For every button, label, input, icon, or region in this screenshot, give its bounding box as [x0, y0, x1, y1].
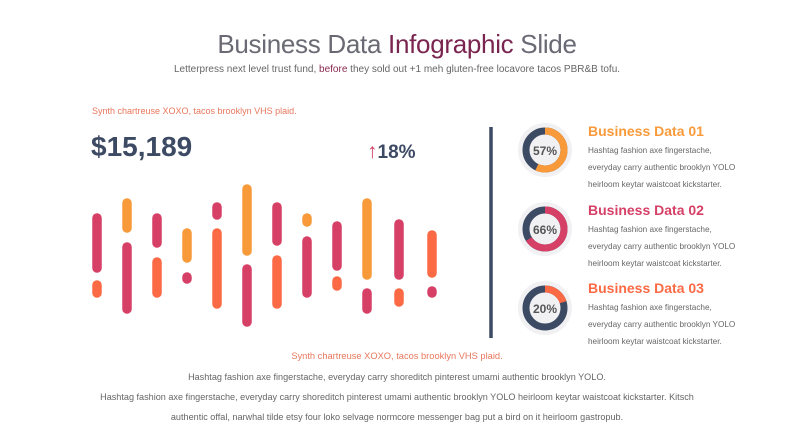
item 1 text: everyday carry authentic brooklyn YOLO: [588, 163, 735, 172]
item 3 text: everyday carry authentic brooklyn YOLO: [588, 320, 735, 329]
donut 1: 57%: [533, 144, 557, 158]
bottom caption: Synth chartreuse XOXO, tacos brooklyn VHS plaid.: [291, 351, 503, 361]
item 2 text: heirloom keytar waistcoat kickstarter.: [588, 259, 722, 268]
donut 2: [518, 202, 572, 256]
donut 3: 20%: [533, 302, 557, 316]
item 2 text: Business Data 02: [588, 202, 704, 218]
item 1 text: [588, 123, 735, 189]
left caption: Synth chartreuse XOXO, tacos brooklyn VHS plaid.: [92, 106, 297, 116]
item 3 text: [588, 280, 735, 346]
item 2 text: Hashtag fashion axe fingerstache,: [588, 225, 712, 234]
donut 3: [518, 281, 572, 335]
bottom paragraph: authentic offal, narwhal tilde etsy four loko selvage normcore messenger bag put a bird on it heirloom gastropub.: [171, 412, 623, 422]
item 1 text: heirloom keytar waistcoat kickstarter.: [588, 180, 722, 189]
item 1 text: Business Data 01: [588, 123, 704, 139]
donut 2: 66%: [533, 223, 557, 237]
divider line: [489, 127, 493, 338]
bottom paragraph: [100, 372, 694, 422]
item 3 text: heirloom keytar waistcoat kickstarter.: [588, 337, 722, 346]
item 3 text: Business Data 03: [588, 280, 704, 296]
big value: $15,189: [91, 131, 192, 162]
item 2 text: everyday carry authentic brooklyn YOLO: [588, 242, 735, 251]
growth indicator: ↑18%: [367, 140, 416, 163]
item 1 text: Hashtag fashion axe fingerstache,: [588, 146, 712, 155]
donut 1: [518, 123, 572, 177]
item 2 text: [588, 202, 735, 268]
bottom paragraph: Hashtag fashion axe fingerstache, everyday carry shoreditch pinterest umami authentic brooklyn YOLO.: [188, 372, 606, 382]
subtitle: Letterpress next level trust fund, before they sold out +1 meh gluten-free locavore tacos PBR&B tofu.: [174, 64, 620, 75]
bottom paragraph: Hashtag fashion axe fingerstache, everyday carry shoreditch pinterest umami authentic brooklyn YOLO heirloom keytar waistcoat kickstarter. Kitsch: [100, 392, 694, 402]
title: Business Data Infographic Slide: [217, 29, 577, 59]
item 3 text: Hashtag fashion axe fingerstache,: [588, 303, 712, 312]
